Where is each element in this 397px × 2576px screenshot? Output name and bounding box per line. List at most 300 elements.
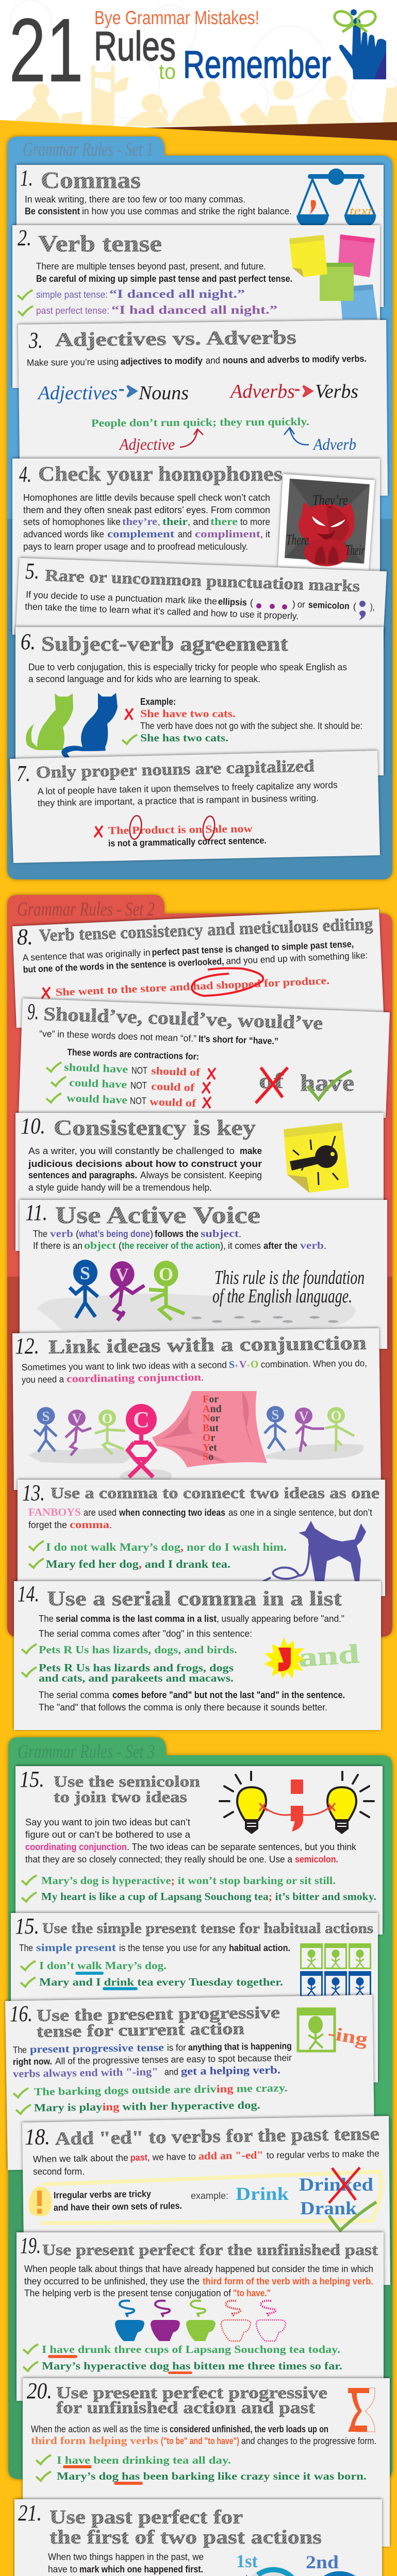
rule 16: present progressive: right now. — [13, 2056, 52, 2067]
heading present progressive — [37, 2004, 280, 2041]
examples: I have been drinking tea all day. — [57, 2454, 231, 2466]
callout: irregular verbs: and have their own sets of rules. — [54, 2200, 182, 2213]
body text — [25, 194, 292, 216]
FANBOYS list: Nor — [203, 1413, 220, 1424]
body text: in how you use commas and strike the right balance. — [82, 206, 292, 216]
figures clause two: O — [330, 1408, 342, 1423]
body text: is for — [167, 2042, 186, 2053]
body text: Be consistent — [25, 206, 80, 216]
examples: Mary is play ing with her hyperactive dog. — [34, 2099, 260, 2114]
body text: . — [109, 1520, 112, 1530]
body text bottom: The serial comma — [39, 1690, 110, 1700]
contraction list: should have — [64, 1061, 128, 1075]
panel: grammar rules set 1 — [7, 137, 392, 879]
rule 7: proper nouns — [10, 751, 380, 863]
FANBOYS list: For — [203, 1394, 219, 1405]
tab label set 1: Grammar Rules - Set 1 — [23, 139, 153, 160]
body text: perfect past tense is changed to simple past tense, — [152, 939, 354, 957]
graphic: of crossed, have checked: of — [259, 1070, 284, 1093]
panel folder background — [7, 137, 392, 879]
tab label set 2: Grammar Rules - Set 2 — [17, 899, 155, 920]
icon: devil polaroid — [278, 474, 375, 570]
icon: balance scale: text — [350, 205, 373, 218]
body text: figure out or can’t be bothered to use a — [25, 1829, 191, 1840]
example: past perfect — [18, 303, 277, 316]
body text line 2: . — [324, 1241, 326, 1251]
contraction list: NOT — [130, 1080, 147, 1091]
icon: green cat — [26, 693, 73, 750]
body text: ("to be" and "to have") — [161, 2436, 239, 2446]
rule 18: add ed — [22, 2116, 390, 2287]
rule 15: semicolon — [15, 1766, 383, 1935]
body text top: The serial comma comes after "dog" in this sentence: — [39, 1629, 252, 1639]
body text: In weak writing, there are too few or too many commas. — [25, 194, 245, 205]
body text line 1: follows the — [155, 1229, 198, 1239]
body text: When people talk about things that have already happened but consider the time in which — [24, 2264, 373, 2274]
number 15: 15. — [20, 1767, 44, 1792]
contraction list: could of — [151, 1080, 195, 1094]
footprints dashes — [191, 1316, 338, 1323]
examples — [22, 1874, 376, 1903]
body text: then take the time to learn what it’s called and how to use it properly. — [25, 601, 299, 621]
shadow cloud — [29, 1444, 363, 1480]
example with circled capitals: The Product is on Sale now — [108, 822, 253, 837]
body text line 1: ) — [150, 1229, 153, 1239]
stick figure S: S — [80, 1263, 90, 1283]
examples: Mary’s dog has been barking like crazy since it was born. — [57, 2470, 367, 2482]
rule 10: consistency is key — [15, 1113, 384, 1251]
body text: Make sure you’re using — [27, 357, 119, 368]
body text: ), — [370, 602, 375, 612]
rule 14: serial comma — [14, 1581, 381, 1730]
body text: and changes to the progressive form. — [241, 2436, 376, 2446]
example with circled verb: She went to the store and had shopped for produce. — [55, 974, 330, 998]
rule 13: comma to connect two ideas — [18, 1480, 385, 1596]
rule 1: commas — [16, 165, 384, 307]
body text: “ve” in these words does not mean “of.” — [39, 1028, 196, 1044]
icon: ellipsis dots — [256, 603, 287, 609]
body text: there — [210, 516, 238, 528]
number 20: 20. — [27, 2378, 52, 2403]
examples: Mary’s hyperactive dog has bitten me three times so far. — [42, 2360, 342, 2372]
body text line 2: object — [84, 1240, 116, 1251]
number 9: 9. — [27, 999, 39, 1024]
stick figure V — [110, 1261, 144, 1320]
body text: . The two ideas can be separate sentences, but you think — [127, 1842, 357, 1852]
icon: two clocks: 2nd — [306, 2552, 339, 2572]
body text: A lot of people have taken it upon themselves to freely capitalize any words — [38, 779, 338, 796]
body text — [28, 1146, 262, 1193]
rule 12: link ideas with a conjunction: coordinating conjunction — [67, 1371, 201, 1385]
body text: considered unfinished, the verb loads up on — [170, 2424, 328, 2434]
number 15 repeated: 15. — [15, 1913, 39, 1939]
figures clause one: O — [102, 1411, 113, 1426]
body text: ) — [292, 599, 295, 609]
body text: that they are so closely connected; they really should be one. Use a — [25, 1854, 293, 1865]
body text line 2: ( — [119, 1241, 122, 1251]
examples: Pets R Us has lizards and frogs, dogs — [39, 1662, 234, 1674]
number 2: 2. — [18, 225, 31, 250]
number 3: 3. — [28, 328, 43, 353]
example 2: Mary fed her dog , and I drank tea. — [46, 1557, 230, 1570]
examples with underlines — [21, 1959, 283, 1990]
diagram: adjectives to nouns: Adjectives — [37, 382, 118, 404]
heading past perfect: Use past perfect for — [49, 2506, 243, 2528]
body text: combination. When you do, — [261, 1358, 367, 1369]
callout: irregular verbs — [29, 2167, 381, 2230]
script note — [212, 1267, 365, 1307]
number 10: 10. — [21, 1113, 45, 1139]
FANBOYS list: Yet — [203, 1442, 217, 1453]
rule 12: link ideas with a conjunction — [12, 1328, 381, 1490]
body text: them and they often sneak past editors’ eyes. From common — [23, 505, 270, 515]
rule 2: verb tense — [12, 225, 380, 388]
examples: and cats, and parakeets and macaws. — [39, 1672, 234, 1684]
example block: She has two cats. — [140, 732, 228, 744]
body text line 1: verb — [50, 1228, 73, 1240]
body text: When two things happen in the past, we — [48, 2552, 204, 2562]
body text: adjectives to modify — [121, 355, 203, 367]
FANBOYS list: But — [203, 1422, 219, 1434]
panel: grammar rules set 2 — [7, 895, 392, 1730]
panel folder background — [8, 1737, 392, 2479]
silhouettes of people — [12, 65, 397, 126]
body text — [28, 1506, 372, 1531]
body text: compliment — [195, 529, 260, 540]
heading use the semicolon — [54, 1772, 200, 1806]
rule 3: adjectives vs adverbs — [18, 320, 388, 500]
body text: semicolon. — [295, 1854, 338, 1865]
body text: their — [162, 516, 188, 528]
example 1: I do not walk Mary’s dog , nor do I wash him. — [46, 1540, 287, 1553]
body text: sentences and paragraphs. — [28, 1170, 137, 1180]
rule 12: link ideas with a conjunction: you need a — [22, 1374, 64, 1385]
body text: V — [239, 1359, 247, 1370]
number 4: 4. — [19, 462, 31, 487]
examples — [22, 1643, 237, 1684]
body text line 2: If there is an — [33, 1241, 82, 1251]
body text: The helping verb is the present tense conjugation of — [24, 2288, 231, 2298]
heading present perfect progressive: Use present perfect progressive — [56, 2384, 327, 2402]
body text line 1: what’s being done — [78, 1229, 150, 1239]
body text: ( — [250, 598, 253, 608]
rule 19: present perfect — [16, 2232, 384, 2401]
body text: and — [206, 355, 220, 366]
body text: third form of the verb with a helping verb. — [203, 2276, 373, 2286]
stick figure O: O — [159, 1264, 173, 1284]
body text: they occurred to be unfinished, they use the — [24, 2276, 200, 2286]
contraction list: NOT — [130, 1096, 146, 1106]
body text line 2 — [33, 1240, 326, 1251]
rule 16: present progressive — [5, 1995, 375, 2170]
example with circled capitals: is not a grammatically correct sentence. — [108, 835, 267, 849]
body text: Say you want to join two ideas but can’t — [25, 1817, 190, 1827]
body text: forget the — [28, 1520, 67, 1530]
FANBOYS list — [203, 1394, 222, 1463]
diagram: adverbs to verbs — [229, 381, 358, 402]
callout: irregular verbs: Irregular verbs are tricky — [54, 2189, 151, 2200]
heading rare or uncommon punctuation marks: Rare or uncommon punctuation marks — [45, 566, 360, 595]
examples: I have drunk three cups of Lapsang Souchong tea today. — [42, 2343, 340, 2355]
body text: The — [13, 2045, 27, 2055]
body text line 2: ), — [220, 1241, 226, 1251]
body text bottom — [39, 1690, 345, 1713]
body text: ellipsis — [218, 596, 247, 607]
rule 16: present progressive: verbs always end with "-ing" — [13, 2065, 158, 2080]
body text line 2: the receiver of the action — [122, 1241, 220, 1251]
icon: devil polaroid: Their — [345, 543, 365, 558]
contraction list: should of — [151, 1064, 201, 1078]
body text: a style guide handy will be a tremendous help. — [28, 1182, 212, 1193]
body text — [24, 2264, 373, 2298]
heading present perfect progressive: for unfinished action and past — [56, 2399, 315, 2417]
body text — [28, 662, 347, 684]
examples with underlines: Mary and I drink tea every Tuesday together. — [39, 1976, 283, 1988]
callout: irregular verbs: Drank — [300, 2198, 357, 2218]
header title block — [9, 0, 386, 101]
heading check your homophones: Check your homophones — [38, 462, 283, 485]
number 11: 11. — [25, 1200, 47, 1225]
body text: O — [251, 1359, 259, 1370]
figures clause two — [264, 1406, 354, 1452]
body text: add an "-ed" — [198, 2149, 263, 2162]
icon: comma and word and: and — [297, 1639, 360, 1673]
body text: A sentence that was originally in — [22, 947, 151, 963]
number 8: 8. — [17, 924, 33, 950]
body text line 2: it comes — [228, 1241, 261, 1251]
rule 8: verb tense consistency — [12, 909, 384, 1028]
body text: habitual action. — [229, 1943, 290, 1953]
number 16: 16. — [10, 2001, 32, 2026]
figure conjunction C — [126, 1404, 157, 1477]
examples: Pets R Us has lizards, dogs, and birds. — [39, 1643, 237, 1656]
body text — [27, 353, 367, 368]
body text: or — [297, 599, 305, 609]
panel folder background — [7, 895, 392, 1637]
body text bottom: comes before "and" but not the last "and" in the sentence. — [112, 1690, 345, 1700]
body text line 1 — [33, 1228, 241, 1240]
number 13: 13. — [22, 1480, 45, 1505]
heading subject-verb agreement: Subject-verb agreement — [41, 632, 289, 655]
heading present progressive: tense for current action — [37, 2020, 244, 2041]
body text — [39, 1028, 278, 1046]
kicker: Bye Grammar Mistakes: Bye Grammar Mistakes! — [94, 7, 259, 28]
title word Rules: Rules — [94, 23, 176, 69]
body text: judicious decisions about how to construct your — [28, 1159, 262, 1169]
body text: complement — [107, 529, 174, 540]
body text line 2: verb — [300, 1240, 324, 1251]
rule 8: verb tense consistency: and you end up with something like: — [226, 950, 368, 966]
title word Remember: Remember — [183, 43, 331, 86]
example block: Example: — [140, 697, 176, 707]
rule 6: subject-verb agreement — [15, 627, 384, 775]
examples — [13, 2081, 288, 2114]
diagram: adjectives to nouns — [37, 382, 189, 404]
panel: grammar rules set 3 — [5, 1737, 392, 2576]
body text top — [39, 1614, 344, 1639]
body text: is the tense you use for any — [119, 1943, 226, 1953]
body text: , it — [260, 529, 270, 539]
body text: they think are important, a practice that is rampant in business writing. — [38, 793, 319, 808]
icon: comma and word and — [264, 1637, 360, 1679]
rule 4: homophones — [12, 459, 380, 635]
rule 8: verb tense consistency: but one of the words in the sentence is overlooked, — [23, 956, 224, 975]
examples with underlines: I don’t walk Mary’s dog. — [39, 1959, 167, 1972]
body text: Be careful of mixing up simple past tense and past perfect tense. — [36, 274, 292, 284]
icon: five cups — [115, 2301, 286, 2341]
callout: irregular verbs: example: — [191, 2191, 228, 2201]
number 6: 6. — [21, 629, 36, 654]
rule 20: present perfect progressive — [23, 2378, 390, 2547]
body text: "to have." — [233, 2288, 271, 2298]
arrow: adjective — [119, 429, 203, 453]
body text line 1: . — [239, 1229, 241, 1239]
body text: There are multiple tenses beyond past, present, and future. — [36, 261, 266, 272]
number 19: 19. — [20, 2233, 41, 2258]
big number 21: 21 — [9, 0, 84, 101]
body text: are used — [84, 1507, 117, 1518]
body text — [31, 2424, 376, 2447]
example block — [122, 697, 362, 744]
contraction list: could have — [69, 1076, 127, 1091]
body text — [23, 493, 270, 552]
body text: simple present — [36, 1941, 116, 1954]
body text line 1: ( — [76, 1229, 79, 1239]
number 5: 5. — [25, 558, 39, 584]
heading use a comma to connect: Use a comma to connect two ideas as one — [51, 1484, 379, 1502]
diagram: adjectives to nouns: Nouns — [138, 382, 189, 404]
example with circled capitals — [94, 815, 267, 849]
icon: two bulbs joined by semicolon — [220, 1772, 374, 1834]
rule 12: link ideas with a conjunction: . — [201, 1372, 204, 1383]
example: simple past — [18, 287, 245, 300]
diagram: adverbs to verbs: Adverbs — [229, 381, 295, 402]
rule 16: simple present — [11, 1913, 378, 2082]
figures clause one: S — [42, 1409, 50, 1424]
heading adjectives vs adverbs: Adjectives vs. Adverbs — [55, 327, 296, 351]
body text — [22, 1358, 367, 1373]
body text: Due to verb conjugation, this is especially tricky for people who speak English as — [28, 662, 347, 672]
figures clause one — [34, 1407, 125, 1455]
icon: tile with -ing — [298, 2009, 369, 2051]
body text: mark which one happened first. — [79, 2564, 203, 2574]
title word to: to — [159, 59, 176, 83]
contraction list: NOT — [131, 1065, 147, 1076]
number 18: 18. — [25, 2124, 50, 2149]
body text: present progressive tense — [30, 2041, 164, 2056]
rule 18: add ed: second form. — [33, 2166, 85, 2177]
body text: + — [235, 1362, 238, 1369]
heading commas: Commas — [41, 167, 141, 193]
figure conjunction C: C — [133, 1407, 150, 1432]
heading use the semicolon: to join two ideas — [54, 1788, 187, 1806]
body text: coordinating conjunction — [25, 1842, 127, 1852]
body text: As a writer, you will constantly be challenged to — [28, 1146, 235, 1156]
shadow cloud — [37, 1294, 356, 1332]
heading verb tense consistency: Verb tense consistency and meticulous editing — [39, 914, 373, 945]
examples — [23, 2343, 342, 2374]
heading link ideas with a conjunction: Link ideas with a conjunction — [48, 1332, 367, 1358]
body text: have to — [48, 2564, 77, 2574]
rule 9: should've could've would've — [19, 998, 390, 1118]
body text: Sometimes you want to link two ideas with a second — [22, 1360, 227, 1372]
body text line 2: after the — [263, 1241, 297, 1251]
body text — [13, 2039, 292, 2056]
body text: + — [246, 1362, 250, 1369]
heading consistency is key: Consistency is key — [54, 1116, 256, 1140]
number 7: 7. — [16, 761, 30, 786]
callout: irregular verbs: Drink — [236, 2183, 289, 2204]
body text: The — [19, 1943, 33, 1953]
body text: advanced words like — [23, 529, 104, 539]
body text: comma — [70, 1518, 110, 1531]
rule 16: present progressive: and — [164, 2066, 178, 2077]
stick figure S — [70, 1260, 98, 1318]
body text — [19, 1941, 290, 1954]
rule 21: past perfect — [14, 2499, 382, 2576]
icon: hand with bow on finger — [332, 9, 386, 79]
icon: tile with -ing: -ing — [326, 2022, 369, 2049]
callout: irregular verbs: Drinked — [299, 2174, 373, 2195]
body text: when connecting two ideas — [119, 1507, 225, 1518]
body text: a second language and for kids who are learning to speak. — [28, 674, 260, 684]
number 21: 21. — [18, 2500, 42, 2526]
FANBOYS list: And — [203, 1403, 222, 1415]
contraction list: would have — [67, 1092, 128, 1106]
body text top: , usually appearing before "and." — [217, 1614, 344, 1624]
icon: semicolon — [359, 601, 366, 620]
example with circled verb — [42, 968, 330, 998]
subheading contractions: These words are contractions for: — [67, 1047, 199, 1062]
body text: to regular verbs to make the — [267, 2148, 379, 2160]
rule 11: use active voice — [20, 1200, 387, 1349]
contraction list — [46, 1061, 216, 1109]
body text top: The — [39, 1614, 54, 1624]
background swirls — [10, 0, 397, 129]
body text — [48, 2552, 213, 2576]
body text top: serial comma is the last comma in a list — [56, 1614, 217, 1624]
body text: Homophones are little devils because spell check won’t catch — [23, 493, 270, 503]
body text: , — [158, 517, 160, 527]
icon: two clocks: 1st — [236, 2551, 258, 2571]
body text: and — [178, 529, 192, 539]
icon: key on sticky note — [284, 1123, 349, 1193]
icon: sticky notes — [289, 234, 377, 319]
body text: , we have to — [147, 2151, 196, 2162]
body text: pays to learn proper usage and to proofread meticulously. — [23, 541, 248, 552]
body text line 1: subject — [201, 1228, 239, 1240]
icon: devil polaroid: There — [286, 532, 309, 548]
body text: third form helping verbs — [31, 2434, 158, 2447]
example: past perfect: past perfect tense: — [36, 306, 109, 316]
FANBOYS list: Or — [203, 1432, 216, 1444]
FANBOYS list: So — [203, 1451, 213, 1463]
rule 16: present progressive: get a helping verb. — [181, 2063, 280, 2077]
icon: dog with leash — [263, 1521, 366, 1582]
heading past perfect: the first of two past actions — [49, 2527, 322, 2548]
heading past perfect — [49, 2506, 322, 2548]
example: simple past: “I danced all night.” — [109, 287, 245, 300]
body text: make — [240, 1146, 262, 1156]
example: simple past: simple past tense: — [36, 290, 108, 300]
number 14: 14. — [18, 1581, 39, 1606]
body text — [22, 939, 354, 963]
body text: FANBOYS — [28, 1506, 81, 1518]
number 12: 12. — [15, 1333, 39, 1359]
figures clause two: S — [271, 1407, 279, 1422]
rule 5: rare punctuation — [15, 558, 387, 649]
body text: S — [229, 1359, 235, 1370]
